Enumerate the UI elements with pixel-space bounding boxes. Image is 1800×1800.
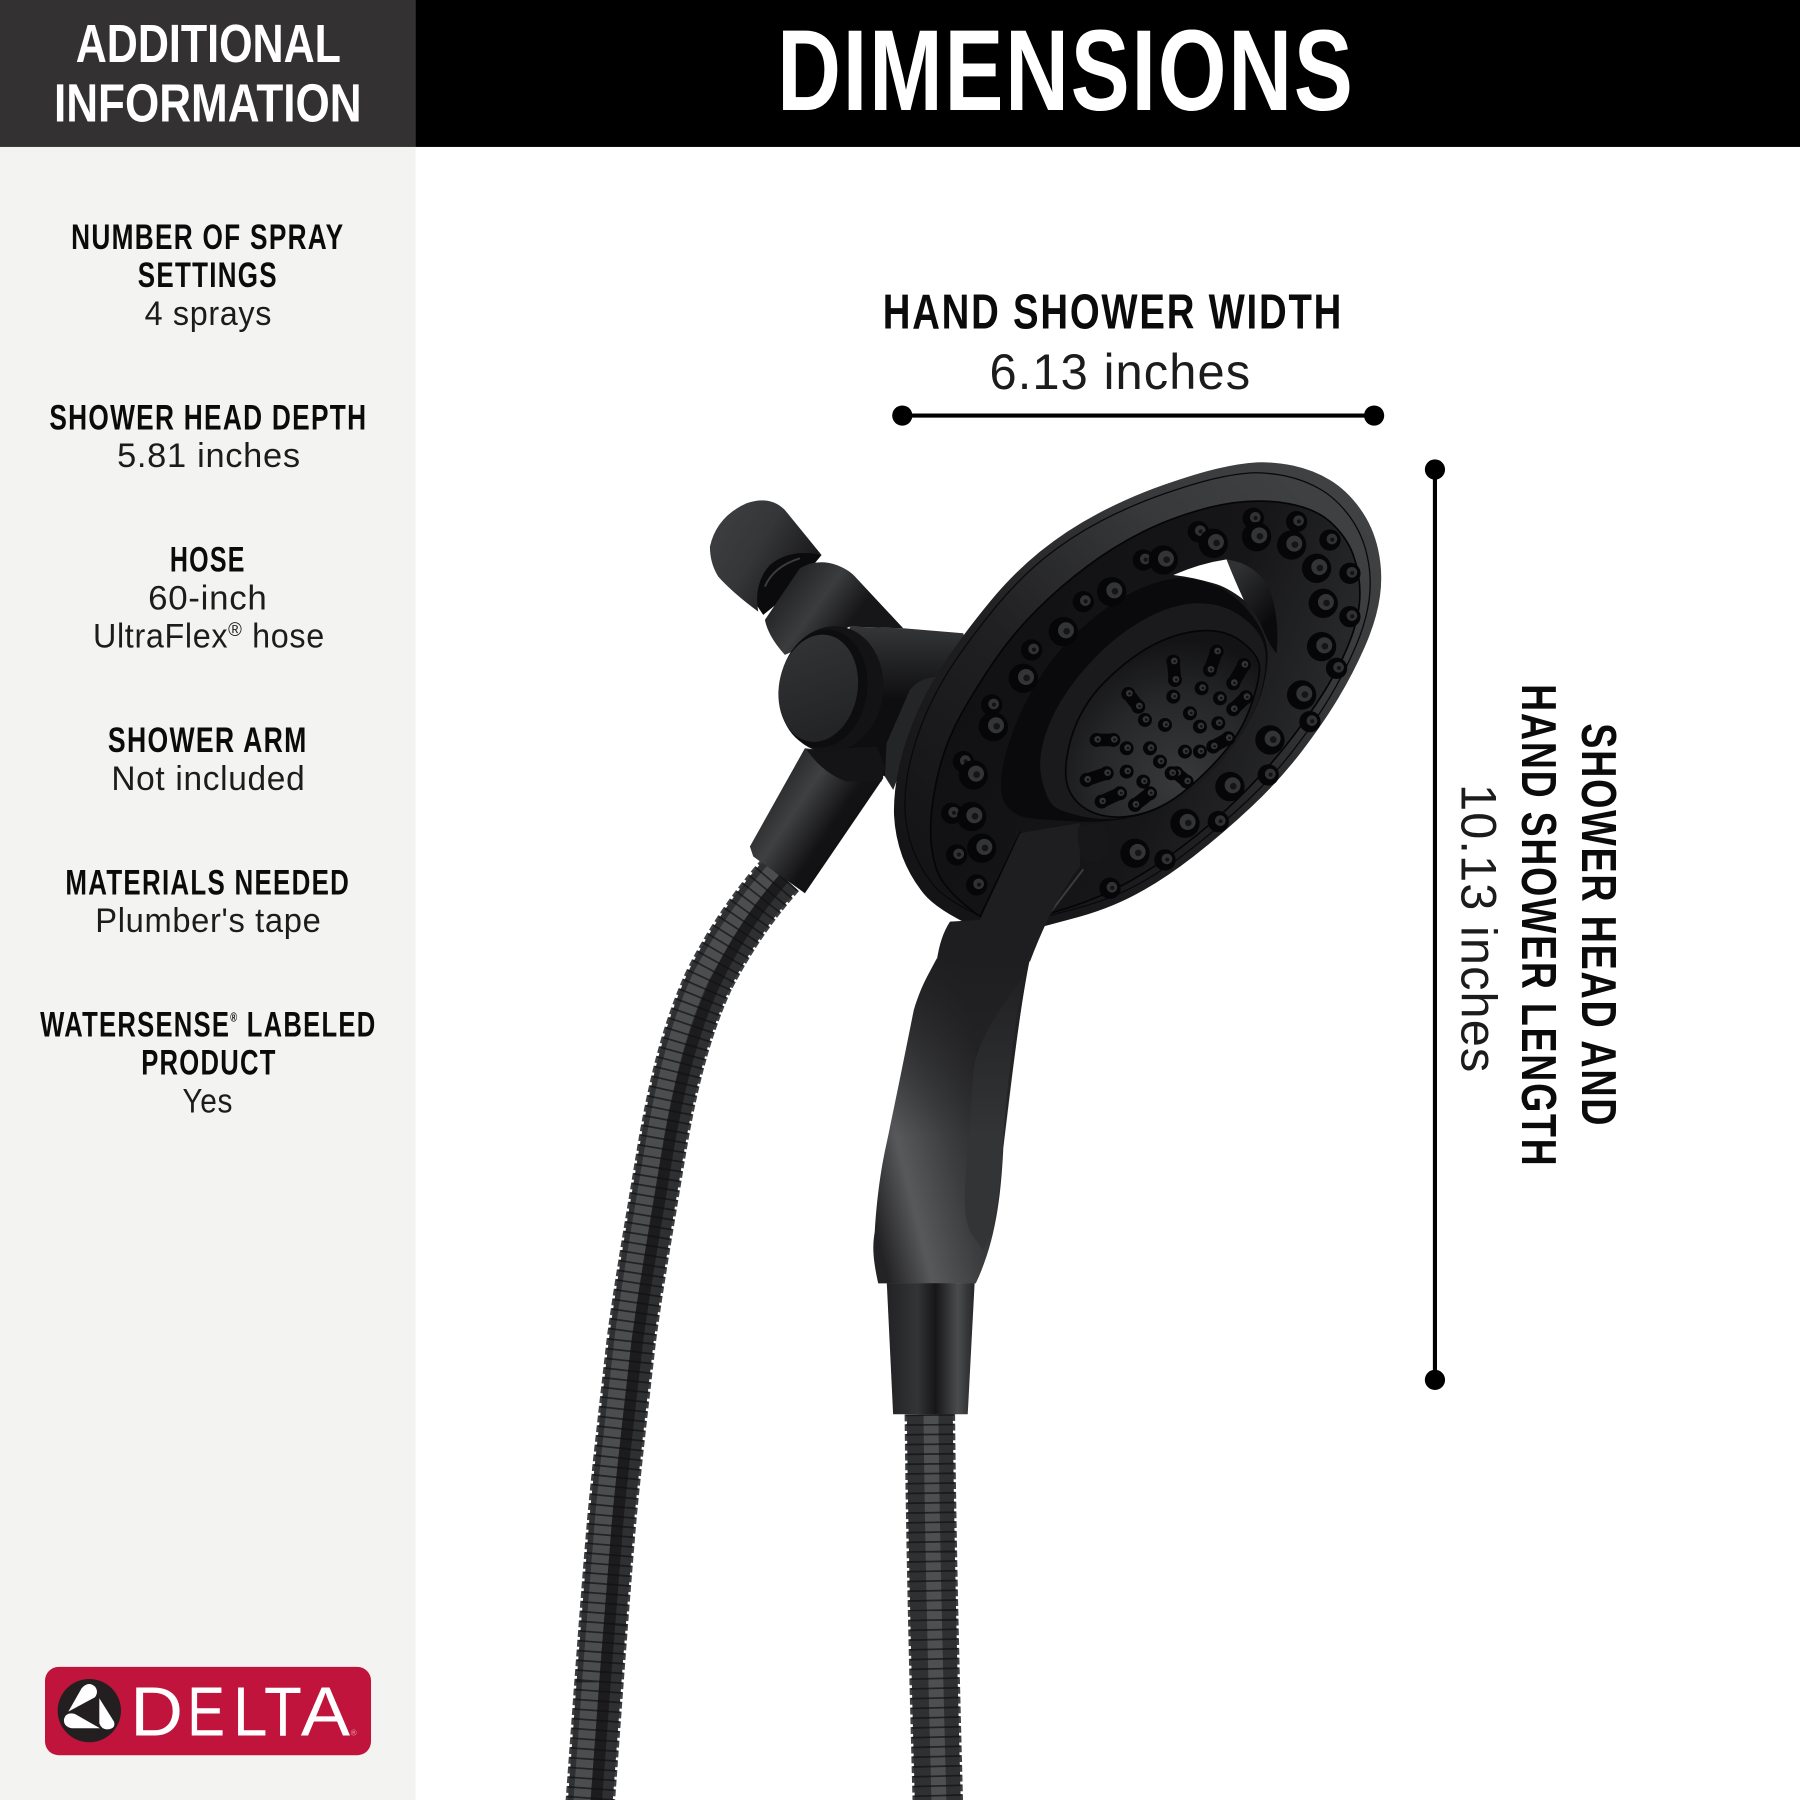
dimension line: length: [1425, 459, 1445, 1390]
spec: watersense labeled product: ®: [230, 1011, 238, 1025]
label: shower head and hand shower length: SHOWER HEAD AND: [1571, 723, 1626, 1127]
logo: delta: ®: [351, 1729, 357, 1738]
diverter body to head: [823, 627, 967, 777]
label: hand shower width: HAND SHOWER WIDTH: [883, 284, 1343, 339]
center spray nozzles: [1080, 645, 1253, 812]
neck rings: [740, 543, 822, 615]
spec: watersense labeled product: PRODUCT: [141, 1043, 277, 1082]
hand shower handle: [873, 959, 1030, 1283]
handle neck: [937, 823, 1080, 962]
spec: hose: 60-inch: [148, 580, 267, 618]
label: hand shower width: [883, 284, 1343, 400]
spec: watersense labeled product: Yes: [183, 1082, 233, 1120]
header bar: dimensions title: [416, 0, 1800, 147]
upper body: [765, 562, 903, 655]
spec: watersense labeled product: [40, 1006, 377, 1120]
spec: shower arm: SHOWER ARM: [108, 721, 308, 760]
spec: hose: ®: [228, 619, 243, 641]
header bar: dimensions title: DIMENSIONS: [777, 7, 1355, 135]
hose: curved left: [582, 870, 784, 1800]
lower right edge detail: [1047, 869, 1083, 917]
spec: materials needed: [65, 863, 350, 940]
spray plate face: [1066, 631, 1260, 817]
spec: shower arm: Not included: [111, 760, 305, 798]
spec: materials needed: Plumber's tape: [95, 902, 321, 940]
spec: number of spray settings: 4 sprays: [145, 295, 272, 333]
spec: watersense labeled product: LABELED: [238, 1006, 377, 1045]
rim groove: [905, 473, 1370, 918]
logo: delta: D: [130, 1673, 183, 1751]
logo: delta: L: [233, 1673, 267, 1751]
spec: number of spray settings: NUMBER OF SPRAY: [71, 218, 344, 257]
panel: additional information sidebar: [0, 0, 416, 1800]
spec: watersense labeled product: WATERSENSE: [40, 1006, 300, 1045]
collar beside opening: [1227, 559, 1277, 653]
outer ring: [894, 462, 1381, 928]
hose: straight right: [930, 1414, 939, 1800]
opening in ring: [1173, 559, 1244, 600]
spec: number of spray settings: SETTINGS: [138, 256, 278, 295]
spec: shower head depth: [49, 398, 367, 475]
spec: shower head depth: 5.81 inches: [117, 437, 301, 475]
spec: hose: UltraFlex: [93, 617, 235, 655]
spec: shower head depth: SHOWER HEAD DEPTH: [49, 398, 367, 437]
shower head: [894, 462, 1381, 962]
flange behind ring: [885, 678, 938, 790]
knob collar: [772, 619, 892, 759]
header bar: additional information: INFORMATION: [54, 74, 362, 134]
hand shower body: [1001, 578, 1268, 822]
label: shower head and hand shower length: [1450, 684, 1626, 1167]
spec: materials needed: MATERIALS NEEDED: [65, 863, 350, 902]
header bar: additional information: [0, 0, 416, 147]
logo: delta: T: [264, 1673, 302, 1751]
logo: delta: A: [301, 1673, 350, 1751]
label: shower head and hand shower length: HAND SHOWER LENGTH: [1511, 684, 1566, 1167]
logo: delta: E: [187, 1673, 225, 1751]
spec: hose: [93, 541, 325, 655]
header bar: additional information: ADDITIONAL: [76, 14, 341, 74]
hand shower collar: [887, 1283, 975, 1414]
spec: hose: HOSE: [170, 541, 246, 580]
label: hand shower width: 6.13 inches: [990, 343, 1251, 400]
spec: hose: hose: [243, 617, 325, 655]
dimension line: width: [892, 405, 1384, 426]
ring spray face: [931, 501, 1360, 923]
spray selector latch: [1078, 823, 1109, 864]
diverter: [710, 500, 967, 893]
spec: number of spray settings: [71, 218, 344, 333]
logo: delta: [45, 1667, 371, 1755]
holder arm: [750, 748, 883, 893]
spec: shower arm: [108, 721, 308, 798]
top nut: [710, 500, 822, 612]
knob disc: [770, 628, 866, 748]
spray plate rim: [1040, 603, 1266, 819]
product: shower system: [582, 462, 1381, 1800]
label: shower head and hand shower length: 10.13 inches: [1450, 784, 1507, 1073]
outer ring nozzles: [941, 508, 1361, 899]
